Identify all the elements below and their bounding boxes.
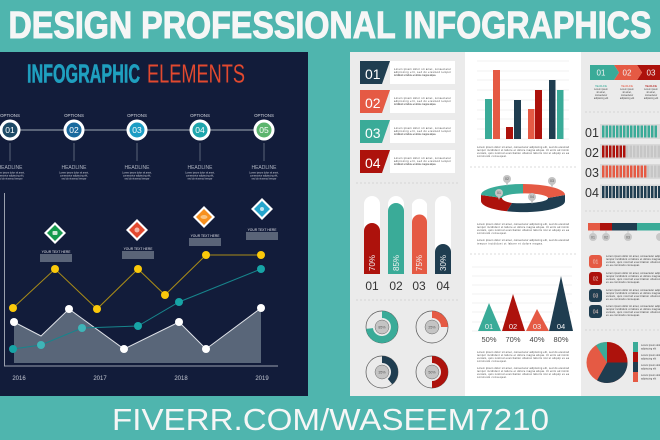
donut gauges: 35% xyxy=(378,370,386,374)
3D ring chart: 03 xyxy=(550,179,554,183)
timeline: HEADLINE xyxy=(251,165,277,171)
callout: orange diamond xyxy=(189,206,221,246)
numbered list rows: adipiscing elit, sed do eiusmod tempor xyxy=(394,100,451,103)
column chart xyxy=(477,61,570,158)
timeline: consectetur adipiscing elit, xyxy=(186,174,214,178)
3D ring chart: Lorem ipsum dolor sit amet, consectetur adipiscing elit, sed do eiusmod xyxy=(477,223,570,226)
vertical percent bars: 85% xyxy=(392,255,401,271)
3D ring chart: tempor incididunt ut labore et dolore magna. xyxy=(477,242,543,246)
triangle chart: 04 xyxy=(557,322,565,331)
panel: light infographic sheet xyxy=(350,52,660,396)
numbered list rows: incididunt ut labore et dolore magna aliqua. xyxy=(394,74,436,77)
heading: infographic elements: INFOGRAPHIC xyxy=(27,58,140,88)
pins xyxy=(495,175,556,204)
year labels: 2019 xyxy=(255,376,269,382)
timeline: 04 xyxy=(195,125,205,135)
area series xyxy=(14,308,261,363)
3D ring chart: commodo consequat. xyxy=(477,232,507,235)
column chart: Lorem ipsum dolor sit amet, consectetur adipiscing elit, sed do eiusmod xyxy=(477,146,570,149)
chevron process: sit amet, xyxy=(622,91,632,94)
3D ring chart: 01 xyxy=(497,191,501,195)
numbered list rows: adipiscing elit, sed do eiusmod tempor xyxy=(394,130,451,133)
pie chart xyxy=(586,342,628,383)
triangle chart: tempor incididunt ut labore et dolore magna aliqua. Ut enim ad minim xyxy=(477,354,569,357)
numbered list rows: incididunt ut labore et dolore magna aliqua. xyxy=(394,133,436,136)
year labels: 2018 xyxy=(174,376,188,382)
callout: red diamond: YOUR TEXT HERE xyxy=(124,247,153,251)
triangle chart: 50% xyxy=(481,335,497,344)
numbered list rows: Lorem ipsum dolor sit amet, consectetur xyxy=(394,127,451,130)
triangle chart: 02 xyxy=(509,322,517,331)
pie legend xyxy=(633,342,660,382)
teal series xyxy=(9,265,265,353)
callout: red diamond xyxy=(122,219,154,259)
donut gauges xyxy=(366,311,448,388)
numbered tabs list: 01 xyxy=(593,260,598,266)
numbered tabs list: Lorem ipsum dolor sit amet, consectetur adip xyxy=(606,255,660,258)
triangle chart: 40% xyxy=(529,335,545,344)
triangle chart: 03 xyxy=(533,322,541,331)
numbered tabs list: Lorem ipsum dolor sit amet, consectetur adip xyxy=(606,272,660,275)
numbered tabs list: ex ea commodo consequat. xyxy=(606,314,640,317)
numbered list rows: incididunt ut labore et dolore magna aliqua. xyxy=(394,163,436,166)
chevron process xyxy=(590,65,660,100)
vertical percent bars: 30% xyxy=(439,255,448,271)
3D ring chart: veniam, quis nostrud exercitation ullamco laboris nisi ut aliquip ex ea xyxy=(477,229,570,232)
vertical percent bars: 02 xyxy=(389,279,403,293)
donut gauges: 25% xyxy=(428,326,436,330)
vertical percent bars xyxy=(364,196,451,293)
numbered list rows: 03 xyxy=(365,125,381,141)
3D ring chart xyxy=(477,175,570,246)
chevron process: Lorem ipsum xyxy=(594,88,608,91)
numbered tabs list: Lorem ipsum dolor sit amet, consectetur adip xyxy=(606,305,660,308)
numbered list rows: incididunt ut labore et dolore magna aliqua. xyxy=(394,103,436,106)
triangle chart: 01 xyxy=(485,322,493,331)
numbered tabs list: ex ea commodo consequat. xyxy=(606,298,640,301)
chevron process: consectetur xyxy=(645,94,657,97)
triangle chart: Lorem ipsum dolor sit amet, consectetur adipiscing elit, sed do eiusmod xyxy=(477,351,570,354)
timeline: 02 xyxy=(69,125,79,135)
striped progress bars xyxy=(585,124,660,200)
chevron process: consectetur xyxy=(595,94,607,97)
chevron process: adipiscing elit xyxy=(594,97,609,100)
3D ring chart: tempor incididunt ut labore et dolore magna aliqua. Ut enim ad minim xyxy=(477,226,569,229)
column chart: commodo consequat. xyxy=(477,155,507,158)
year labels xyxy=(12,376,269,382)
line chart xyxy=(4,193,278,382)
segmented bar with pins: 03 xyxy=(626,236,630,240)
chevron process: 03 xyxy=(647,68,656,78)
chevron process: sit amet, xyxy=(596,91,606,94)
column chart: veniam, quis nostrud exercitation ullamco laboris nisi ut aliquip ex ea xyxy=(477,152,570,155)
timeline: Lorem ipsum dolor sit amet, xyxy=(122,172,152,174)
numbered tabs list: veniam, quis nostrud exercitation ullamco xyxy=(606,278,660,281)
pie legend: adipiscing elit xyxy=(641,368,656,370)
donut gauges: 50% xyxy=(428,370,436,374)
striped progress bars: 01 xyxy=(585,126,599,140)
donut gauges: 85% xyxy=(378,326,386,330)
column chart: tempor incididunt ut labore et dolore magna aliqua. Ut enim ad minim xyxy=(477,149,569,152)
chevron process: adipiscing elit xyxy=(620,97,635,100)
callout: green diamond: YOUR TEXT HERE xyxy=(42,250,71,254)
chevron process: sit amet, xyxy=(646,91,656,94)
numbered tabs list: veniam, quis nostrud exercitation ullamco xyxy=(606,311,660,314)
triangle chart: 70% xyxy=(505,335,521,344)
timeline: HEADLINE xyxy=(61,165,87,171)
triangle chart xyxy=(472,267,573,379)
timeline: consectetur adipiscing elit, xyxy=(250,174,278,178)
yellow series xyxy=(9,251,265,313)
timeline: Lorem ipsum dolor sit amet, xyxy=(249,172,279,174)
numbered list rows: 02 xyxy=(365,95,381,111)
numbered tabs list: tempor incididunt ut labore et dolore magna xyxy=(606,292,660,295)
timeline: OPTIONS xyxy=(127,113,147,118)
segmented bar with pins: 01 xyxy=(591,236,595,240)
numbered tabs list: 02 xyxy=(593,276,598,282)
timeline: consectetur adipiscing elit, xyxy=(60,174,88,178)
numbered tabs list: ex ea commodo consequat. xyxy=(606,264,640,267)
numbered list rows xyxy=(360,61,455,173)
chevron process: consectetur xyxy=(621,94,633,97)
triangle chart: 80% xyxy=(553,335,569,344)
timeline: sed do eiusmod tempor xyxy=(125,178,150,180)
triangle chart: veniam, quis nostrud exercitation ullamco laboris nisi ut aliquip ex ea xyxy=(477,357,570,360)
striped progress bars: 04 xyxy=(585,186,599,200)
chevron process: Lorem ipsum xyxy=(644,88,658,91)
timeline: OPTIONS xyxy=(64,113,84,118)
timeline: HEADLINE xyxy=(187,165,213,171)
chevron process: adipiscing elit xyxy=(644,97,659,100)
callout: blue diamond xyxy=(246,198,278,240)
segmented bar with pins: 02 xyxy=(604,236,608,240)
timeline: sed do eiusmod tempor xyxy=(62,178,87,180)
callout: blue diamond: YOUR TEXT HERE xyxy=(248,228,277,232)
vertical percent bars: 04 xyxy=(436,279,450,293)
timeline xyxy=(0,113,279,180)
numbered tabs list xyxy=(589,255,660,318)
year labels: 2017 xyxy=(93,376,107,382)
triangle chart: Lorem ipsum dolor sit amet, consectetur adipiscing elit, sed do eiusmod xyxy=(477,367,570,370)
timeline: Lorem ipsum dolor sit amet, xyxy=(185,172,215,174)
vertical percent bars: 75% xyxy=(415,255,424,271)
timeline: OPTIONS xyxy=(0,113,20,118)
numbered list rows: adipiscing elit, sed do eiusmod tempor xyxy=(394,71,451,74)
timeline: 01 xyxy=(5,125,15,135)
striped progress bars: 02 xyxy=(585,146,599,160)
numbered list rows: 01 xyxy=(365,66,381,82)
triangle chart: commodo consequat. xyxy=(477,376,507,379)
footer url: FIVERR.COM/WASEEM7210 xyxy=(112,402,549,437)
numbered tabs list: ex ea commodo consequat. xyxy=(606,281,640,284)
chevron process: HEADLINE xyxy=(595,85,607,88)
chevron process: Lorem ipsum xyxy=(620,88,634,91)
timeline: sed do eiusmod tempor xyxy=(252,178,277,180)
triangle chart: commodo consequat. xyxy=(477,360,507,363)
timeline: 05 xyxy=(259,125,269,135)
pie legend: adipiscing elit xyxy=(641,378,656,380)
3D ring chart: Lorem ipsum dolor sit amet, consectetur adipiscing elit, sed do eiusmod xyxy=(477,239,570,242)
numbered tabs list: 03 xyxy=(593,294,598,300)
vertical percent bars: 70% xyxy=(368,255,377,271)
numbered tabs list: veniam, quis nostrud exercitation ullamco xyxy=(606,261,660,264)
pie legend: adipiscing elit xyxy=(641,348,656,350)
panel: dark infographic elements xyxy=(0,52,308,396)
vertical percent bars: 03 xyxy=(412,279,426,293)
callout: green diamond xyxy=(40,222,72,262)
timeline: consectetur adipiscing elit, xyxy=(123,174,151,178)
striped progress bars: 03 xyxy=(585,166,599,180)
timeline: 03 xyxy=(132,125,142,135)
timeline: OPTIONS xyxy=(190,113,210,118)
numbered list rows: Lorem ipsum dolor sit amet, consectetur xyxy=(394,157,451,160)
timeline: sed do eiusmod tempor xyxy=(188,178,213,180)
numbered tabs list: 04 xyxy=(593,310,598,316)
timeline: OPTIONS xyxy=(254,113,274,118)
numbered tabs list: Lorem ipsum dolor sit amet, consectetur adip xyxy=(606,289,660,292)
chevron process: 01 xyxy=(597,68,606,78)
callout: orange diamond: YOUR TEXT HERE xyxy=(191,234,220,238)
chevron process: 02 xyxy=(623,68,632,78)
numbered tabs list: tempor incididunt ut labore et dolore magna xyxy=(606,258,660,261)
numbered list rows: adipiscing elit, sed do eiusmod tempor xyxy=(394,160,451,163)
segmented bar with pins xyxy=(588,223,660,241)
triangle chart: tempor incididunt ut labore et dolore magna aliqua. Ut enim ad minim xyxy=(477,370,569,373)
triangle chart: veniam, quis nostrud exercitation ullamco laboris nisi ut aliquip ex ea xyxy=(477,373,570,376)
numbered list rows: Lorem ipsum dolor sit amet, consectetur xyxy=(394,97,451,100)
numbered tabs list: tempor incididunt ut labore et dolore magna xyxy=(606,308,660,311)
numbered tabs list: tempor incididunt ut labore et dolore magna xyxy=(606,275,660,278)
3D ring chart: 02 xyxy=(505,177,509,181)
timeline: HEADLINE xyxy=(124,165,150,171)
numbered tabs list: veniam, quis nostrud exercitation ullamco xyxy=(606,295,660,298)
chevron process: HEADLINE xyxy=(621,85,633,88)
numbered list rows: 04 xyxy=(365,155,381,171)
timeline: Lorem ipsum dolor sit amet, xyxy=(59,172,89,174)
vertical percent bars: 01 xyxy=(365,279,379,293)
3D ring chart: 04 xyxy=(530,195,534,199)
chevron process: HEADLINE xyxy=(645,85,657,88)
heading: infographic elements: ELEMENTS xyxy=(147,58,245,88)
year labels: 2016 xyxy=(12,376,26,382)
numbered list rows: Lorem ipsum dolor sit amet, consectetur xyxy=(394,68,451,71)
pie legend: adipiscing elit xyxy=(641,358,656,360)
